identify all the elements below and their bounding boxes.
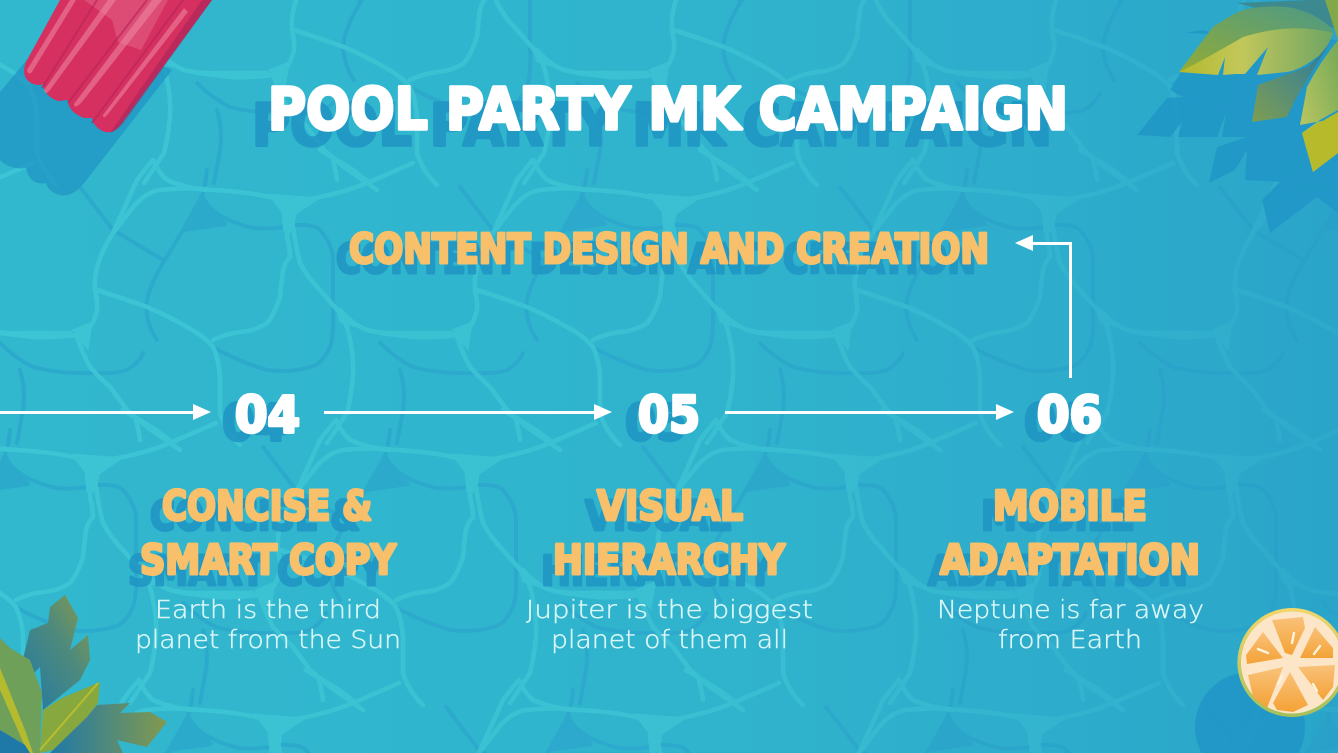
description: planet of them all [551,625,788,654]
number 06: 06 [1037,386,1102,444]
pool float shadow [0,20,172,195]
heading: concise and smart copy: CONCISE & [150,492,360,540]
step 06 [928,386,1204,654]
number 06: 06 [1024,394,1089,452]
description [526,595,813,654]
description: planet from the Sun [135,625,401,654]
heading: mobile adaptation [928,482,1200,595]
icon: pink pool float [24,0,212,133]
step 05 [526,386,813,654]
number 05: 05 [625,394,687,452]
heading: concise and smart copy: SMART COPY [140,536,397,584]
heading: mobile adaptation: MOBILE [993,482,1147,530]
shadow of orange [1195,672,1305,753]
heading: concise and smart copy [128,482,397,595]
icon: orange slice [1237,608,1338,717]
heading: mobile adaptation: ADAPTATION [928,547,1188,595]
heading: concise and smart copy: SMART COPY [128,547,385,595]
title: POOL PARTY MK CAMPAIGN [268,75,1068,143]
icon: palm leaves bottom left [0,595,167,753]
heading: visual hierarchy: VISUAL [585,492,731,540]
heading: content design and creation: CONTENT DESIGN AND CREATION [336,235,976,283]
arrow: 05 to 06 [725,404,1014,420]
heading: visual hierarchy: HIERARCHY [541,547,774,595]
title: POOL PARTY MK CAMPAIGN [252,91,1052,159]
heading: visual hierarchy: HIERARCHY [553,536,786,584]
number 04: 04 [222,394,287,452]
description [937,595,1204,654]
heading: visual hierarchy [541,482,786,595]
arrow: into step 04 [0,404,211,420]
description: Earth is the third [155,595,381,624]
heading: mobile adaptation: MOBILE [981,492,1135,540]
arrow: 04 to 05 [324,404,612,420]
icon: palm leaves top right [1179,0,1338,172]
heading: mobile adaptation: ADAPTATION [940,536,1200,584]
description: Neptune is far away [937,595,1204,624]
step 04 [128,386,401,654]
shadow of top right leaves [1137,30,1338,233]
heading: content design and creation: CONTENT DESIGN AND CREATION [349,225,989,273]
heading: visual hierarchy: VISUAL [597,482,743,530]
arrow: 06 up to content design [1015,235,1072,378]
description [135,595,401,654]
description: from Earth [998,625,1142,654]
heading: concise and smart copy: CONCISE & [162,482,372,530]
number 05: 05 [638,386,700,444]
description: Jupiter is the biggest [526,595,813,624]
number 04: 04 [235,386,300,444]
